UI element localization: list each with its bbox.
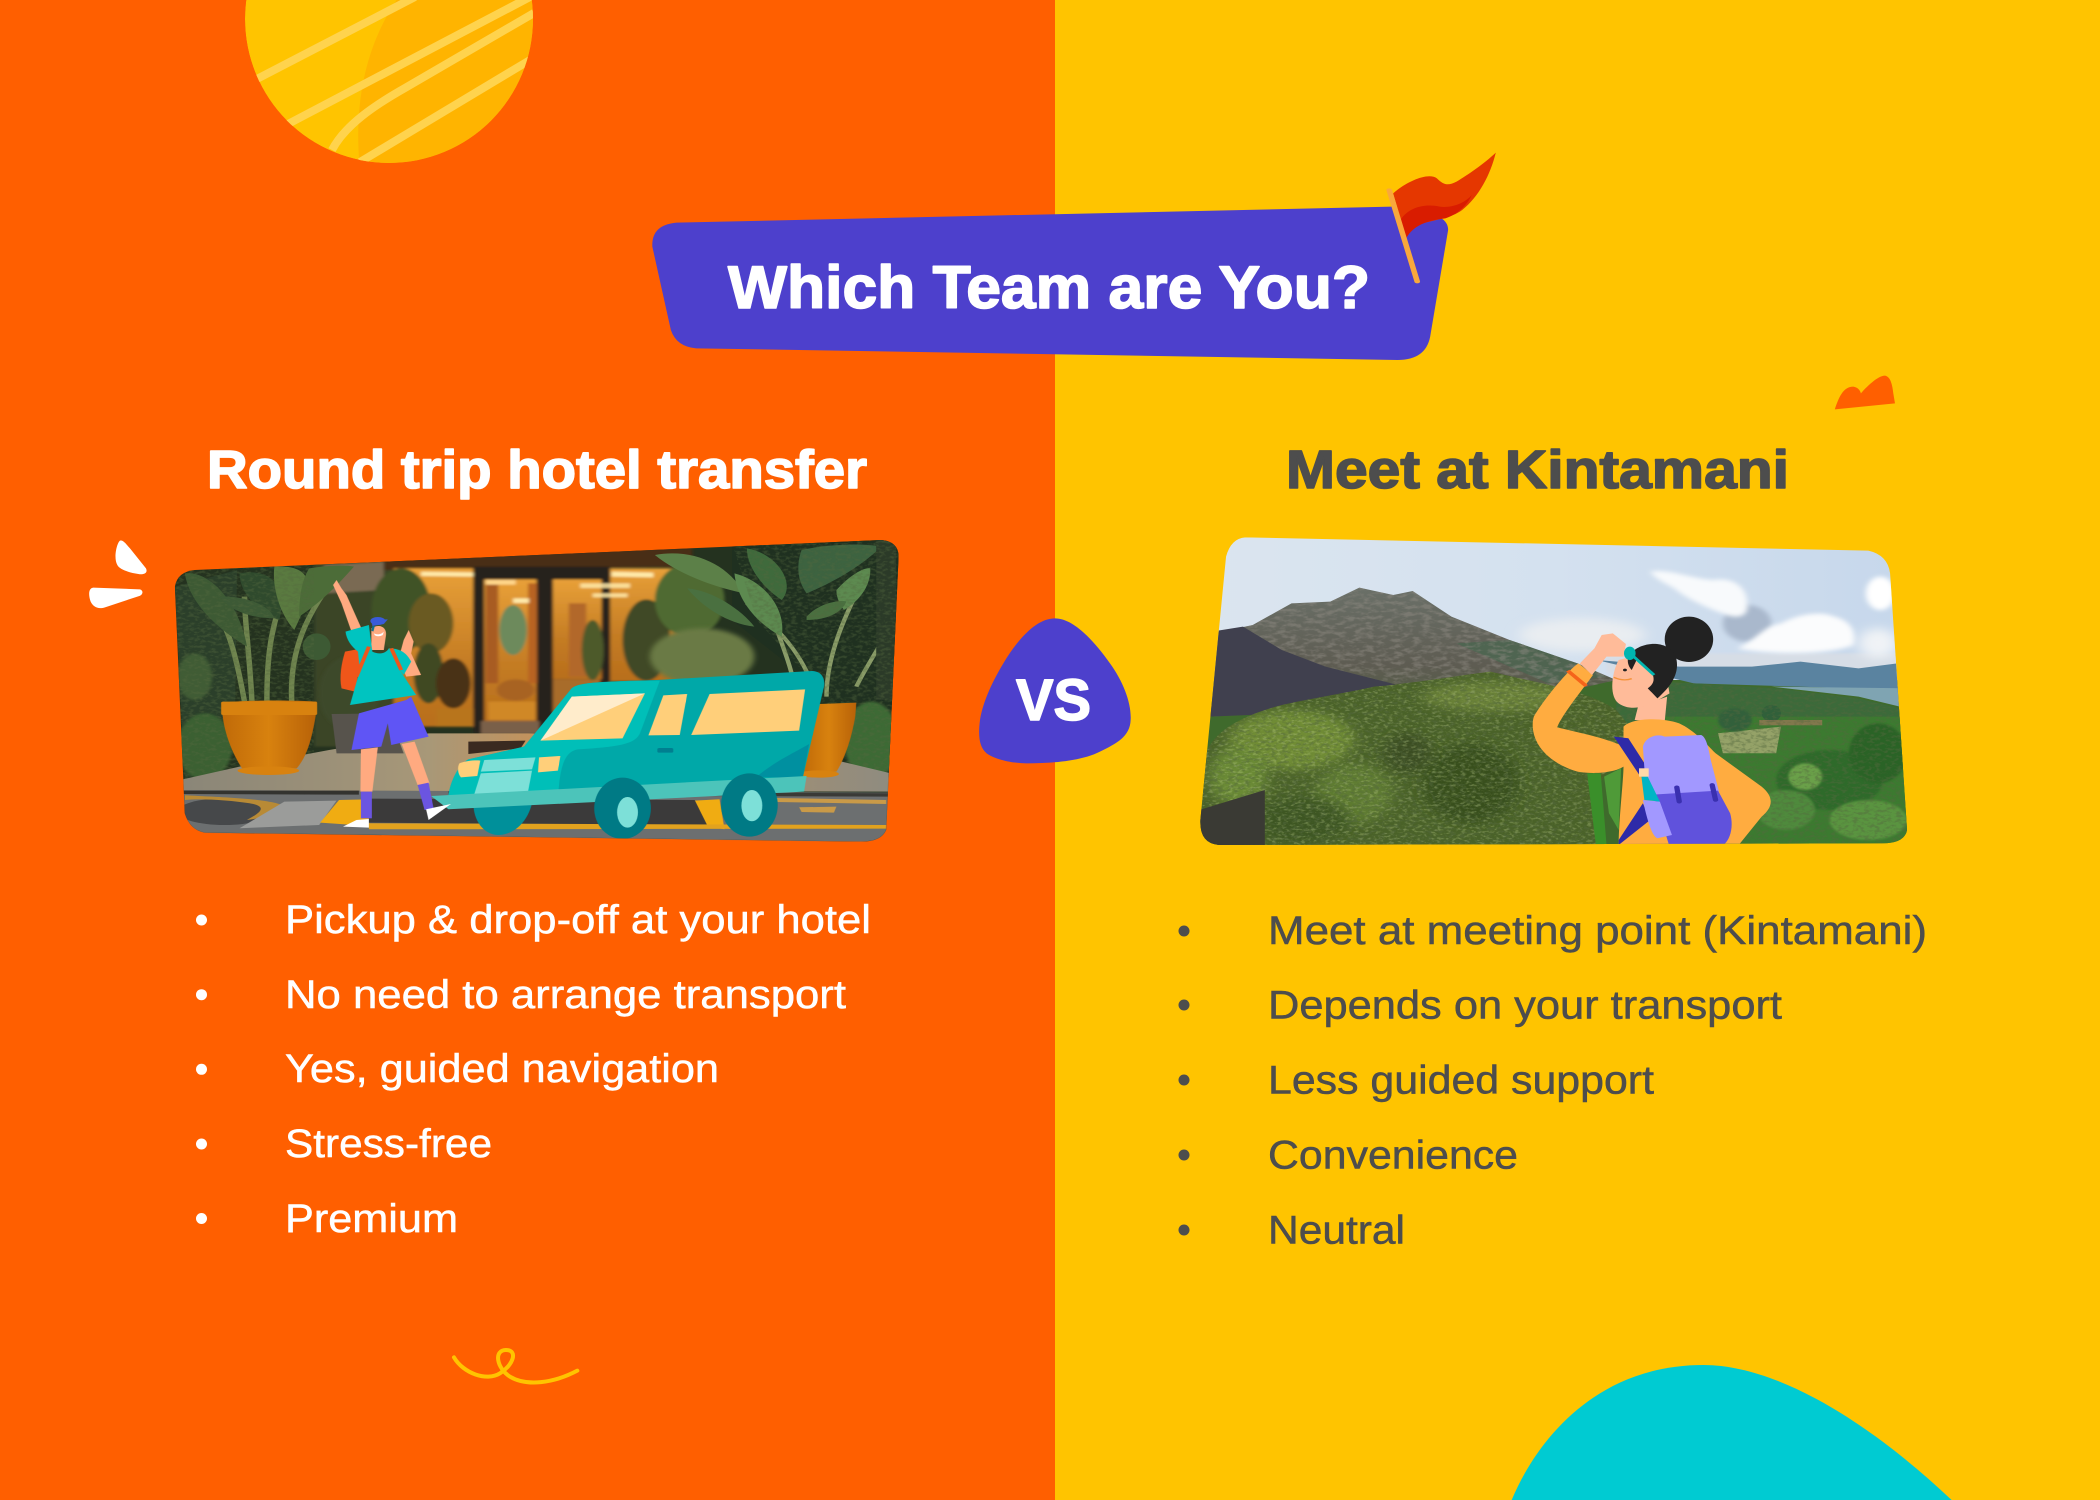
decorative white sparkle marks	[89, 540, 147, 608]
title banner with flag	[652, 153, 1496, 360]
decorative yellow squiggle	[454, 1350, 577, 1383]
bullet row 5: Premium	[285, 1197, 458, 1241]
vs label: VS	[1016, 668, 1091, 733]
title text: Which Team are You?	[728, 254, 1370, 321]
bullet list: left column	[196, 898, 871, 1241]
bullet row 2: No need to arrange transport	[285, 973, 846, 1017]
decorative orange cloud mark	[1835, 376, 1895, 409]
left tropical plants	[175, 566, 354, 778]
bullet row 3: Yes, guided navigation	[285, 1047, 719, 1091]
bullet row 1: Meet at meeting point (Kintamani)	[1268, 909, 1927, 953]
bullet list: right column	[1178, 909, 1927, 1252]
panel: orange left background	[0, 0, 1055, 1500]
bullet row 4: Stress-free	[285, 1122, 492, 1166]
badge: VS	[979, 618, 1131, 763]
base for lower landscape	[1195, 680, 1912, 847]
volcano	[1209, 587, 1621, 720]
heading: left column: Round trip hotel transfer	[207, 440, 867, 500]
foreground trees	[1199, 670, 1636, 847]
bullet row 4: Convenience	[1268, 1134, 1518, 1178]
distant hills and lake	[1597, 660, 1912, 733]
bullet row 2: Depends on your transport	[1268, 984, 1782, 1028]
bullet row 4	[196, 1122, 492, 1166]
decorative striped sun	[245, 0, 540, 170]
bullet row 3: Less guided support	[1268, 1058, 1654, 1102]
right tropical plants	[650, 540, 901, 780]
terracotta pots	[221, 701, 856, 778]
photo: hotel entrance with traveller and van	[170, 537, 906, 847]
photo: Kintamani volcano with traveller	[1195, 533, 1912, 847]
sky and clouds	[1195, 533, 1912, 700]
bullet row 5: Neutral	[1268, 1208, 1405, 1252]
bullet row 4	[1178, 1134, 1518, 1178]
photo background foliage	[170, 537, 906, 847]
hotel facade and glass doors	[314, 548, 724, 747]
banner shape	[652, 207, 1448, 360]
illustration: teal van	[431, 671, 824, 839]
ground and driveway	[177, 733, 891, 847]
bullet row 1: Pickup & drop-off at your hotel	[285, 898, 871, 942]
panel: yellow right background	[1055, 0, 2100, 1500]
illustration: traveller with backpack	[1533, 617, 1771, 847]
vs blob	[979, 618, 1131, 763]
foliage texture overlay	[170, 537, 906, 793]
decorative teal blob	[1512, 1365, 1952, 1500]
illustration: waving traveller	[333, 580, 451, 828]
icon: red flag	[1389, 153, 1496, 282]
heading: right column: Meet at Kintamani	[1286, 440, 1789, 500]
right valley forest	[1616, 680, 1912, 847]
bullet row 5	[196, 1197, 458, 1241]
bullet row 5	[1178, 1208, 1405, 1252]
